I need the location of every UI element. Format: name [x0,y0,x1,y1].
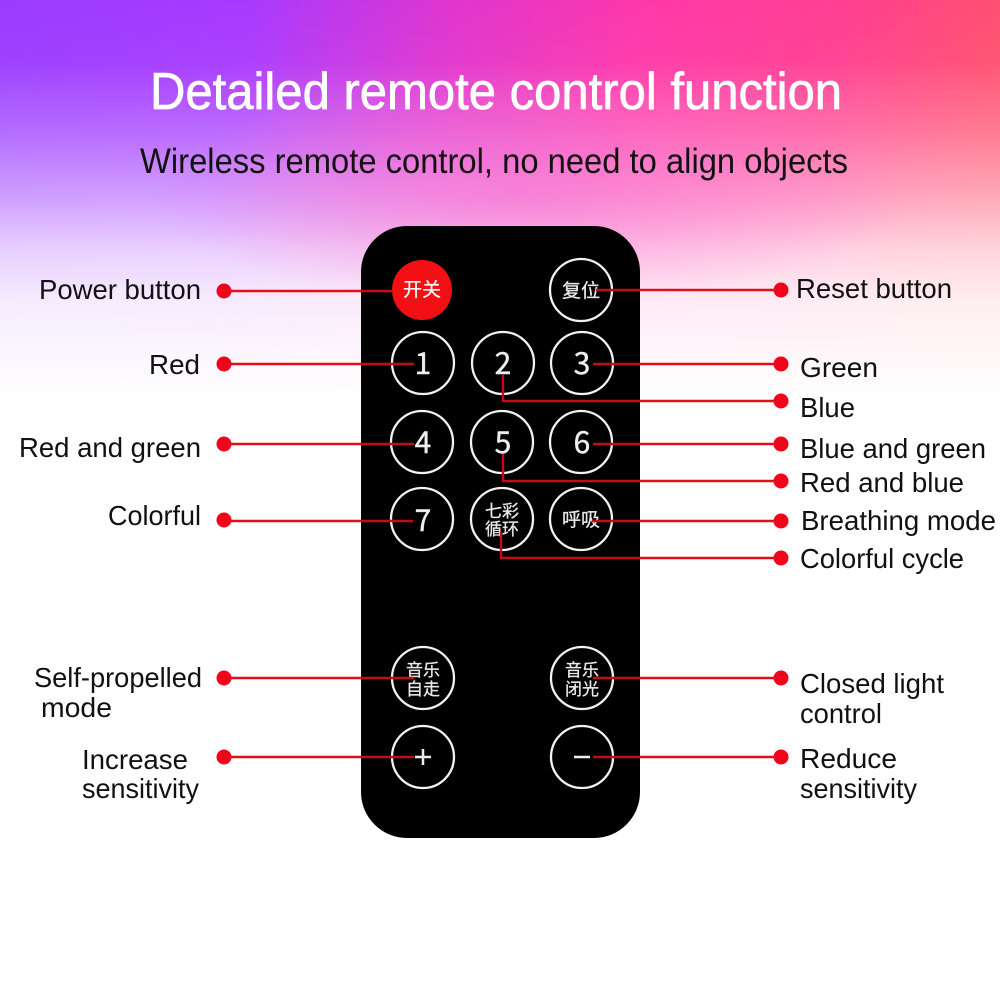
left label: increase sensitivity: Increase [82,744,188,775]
button: 3 [551,332,613,394]
button: 2: 2 [495,339,511,383]
button: 2 [472,332,534,394]
title: Detailed remote control function [150,63,842,121]
button: music self-propelled: 音乐 [406,661,440,680]
button: 6 [550,411,612,473]
right label: reset button [596,273,952,304]
button: 4: 4 [415,418,431,462]
button: 1 [392,332,454,394]
button: music light off: 闭光 [565,680,599,699]
button: breathing: 呼吸 [562,509,600,531]
button: minus [551,726,613,788]
right label: blue and green: Blue and green [800,433,986,464]
right label: breathing mode: Breathing mode [801,505,996,536]
right label: reduce sensitivity [593,743,917,804]
background gradient [0,0,1000,400]
left label: power button: Power button [39,274,201,305]
button: 6: 6 [574,418,590,462]
button: power [392,260,452,320]
left label: red and green [19,432,414,463]
right label: colorful cycle: Colorful cycle [800,543,964,574]
left label: increase sensitivity [82,744,414,804]
left label: red: Red [149,349,200,380]
left label: power button [39,274,393,305]
right label: reduce sensitivity: Reduce [800,743,897,774]
button: 7 [391,488,453,550]
left label: colorful [108,500,413,531]
button: 5: 5 [495,418,511,462]
left label: increase sensitivity: sensitivity [82,773,199,804]
button: music light off [551,647,613,709]
left label: self-propelled mode: mode [41,692,112,723]
right label: reset button: Reset button [796,273,952,304]
left label: red and green: Red and green [19,432,201,463]
right label: blue [503,375,855,423]
left label: self-propelled mode [34,662,414,723]
right label: red and blue [503,454,964,498]
button: 4 [391,411,453,473]
right label: closed light control [593,668,944,729]
right label: breathing mode [592,505,996,536]
right label: reduce sensitivity: sensitivity [800,773,917,804]
right label: blue and green [593,433,986,464]
button: 3: 3 [574,339,590,383]
remote control body [361,226,640,838]
button: music light off: 音乐 [565,661,599,680]
right label: closed light control: control [800,698,882,729]
subtitle: Wireless remote control, no need to align objects [140,142,848,181]
button: colorful cycle [471,488,533,550]
button: colorful cycle: 七彩 [485,502,519,521]
right label: green [593,352,878,383]
button: reset: 复位 [562,280,600,302]
left label: colorful: Colorful [108,500,201,531]
button: 1: 1 [415,339,431,383]
button: reset [550,259,612,321]
button: power: 开关 [403,279,441,301]
button: music self-propelled: 自走 [406,680,440,699]
right label: green: Green [800,352,878,383]
right label: red and blue: Red and blue [800,467,964,498]
button: breathing [550,488,612,550]
button: colorful cycle: 循环 [485,520,519,539]
left label: red [149,349,414,380]
right label: blue: Blue [800,392,855,423]
button: plus [392,726,454,788]
right label: colorful cycle [501,532,964,574]
right label: closed light control: Closed light [800,668,944,699]
button: 7: 7 [415,496,431,540]
button: 5 [471,411,533,473]
button: music self-propelled [392,647,454,709]
left label: self-propelled mode: Self-propelled [34,662,202,693]
